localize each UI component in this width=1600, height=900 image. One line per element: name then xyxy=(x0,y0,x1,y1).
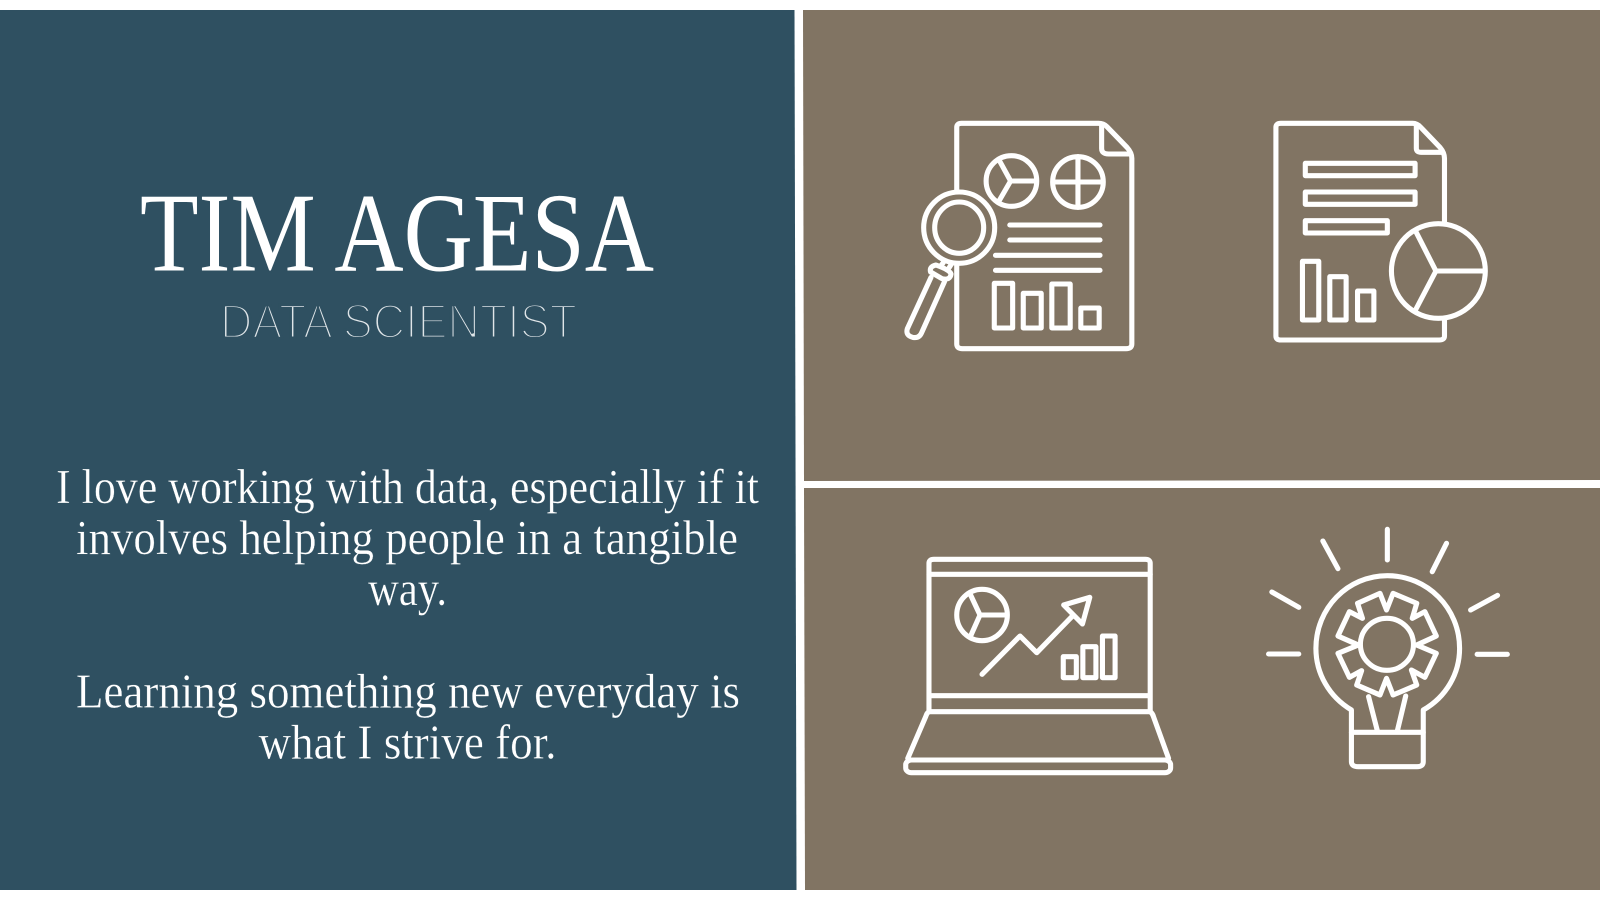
bio text: Learning something new everyday is xyxy=(76,664,740,718)
icon: report with magnifying glass xyxy=(907,123,1132,349)
icon: document with pie chart xyxy=(1276,123,1485,340)
title: TIM AGESA xyxy=(140,172,654,296)
bio text: what I strive for. xyxy=(258,714,556,770)
panel: bottom icons xyxy=(804,488,1600,890)
icon: laptop with charts xyxy=(906,559,1171,773)
bio text: involves helping people in a tangible xyxy=(76,510,738,565)
icon: light bulb with gear xyxy=(1269,529,1507,767)
bio text xyxy=(56,459,759,770)
subtitle: DATA SCIENTIST xyxy=(220,296,577,349)
bio text: I love working with data, especially if it xyxy=(56,459,759,514)
panel: top icons xyxy=(803,10,1600,481)
bio text: way. xyxy=(368,561,447,616)
panel: profile xyxy=(0,10,796,890)
